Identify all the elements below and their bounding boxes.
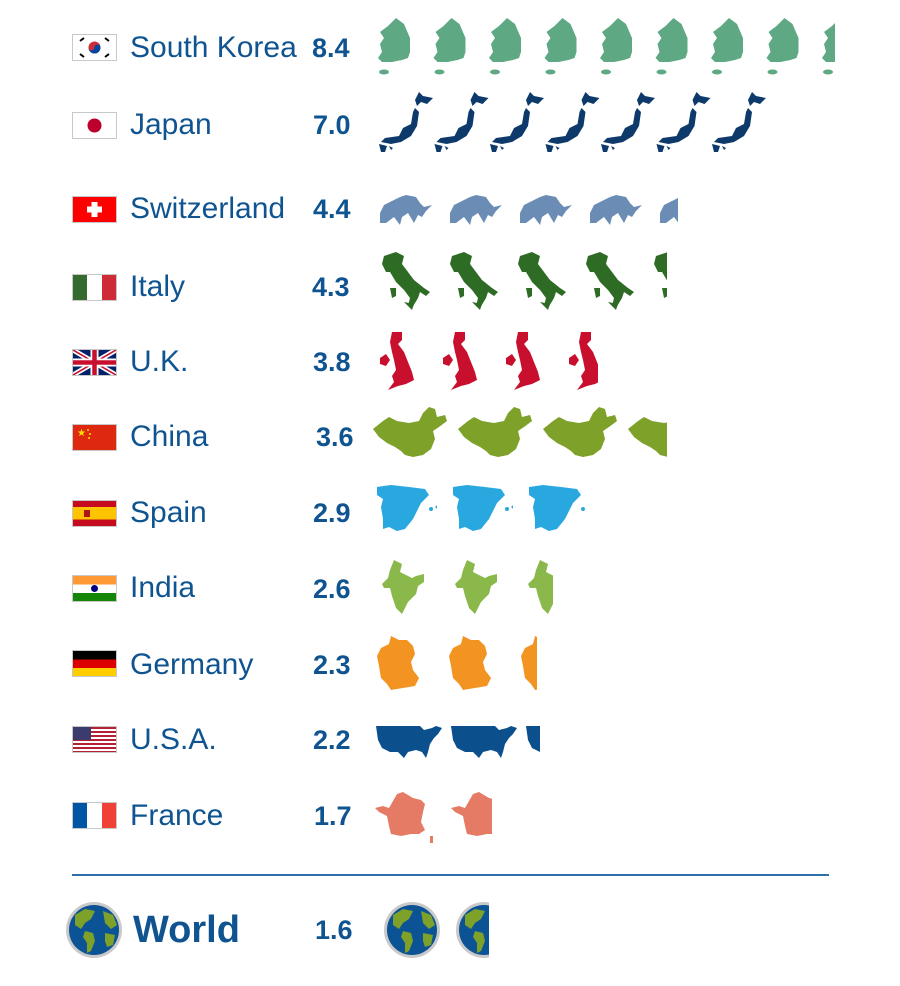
icons: Japan — [379, 92, 766, 152]
label: U.S.A.: U.S.A. — [130, 723, 217, 756]
label: Spain: Spain — [130, 496, 207, 529]
icons: U.K. — [380, 332, 598, 390]
icons: U.S.A. — [376, 726, 540, 758]
label: Germany: Germany — [130, 648, 253, 681]
flag: France — [72, 802, 117, 829]
icons: China — [373, 407, 667, 457]
value: 3.8: 3.8 — [313, 347, 351, 377]
value: 4.4: 4.4 — [313, 194, 351, 224]
row: South Korea — [72, 18, 835, 74]
flag: Japan — [72, 112, 117, 139]
flag: Spain — [72, 500, 117, 527]
value: 8.4: 8.4 — [312, 33, 350, 63]
value: 2.6: 2.6 — [313, 574, 351, 604]
value: 2.9: 2.9 — [313, 498, 351, 528]
label: Japan: Japan — [130, 108, 212, 141]
label: South Korea: South Korea — [130, 31, 297, 64]
icons: France — [375, 792, 492, 843]
icons: India — [382, 560, 553, 614]
flag: South Korea — [72, 34, 117, 61]
row: Japan — [72, 92, 766, 152]
icons: Germany — [377, 636, 537, 690]
flag: India — [72, 575, 117, 602]
icons: Spain — [377, 485, 585, 531]
flag: Italy — [72, 274, 117, 301]
label: France: France — [130, 799, 223, 832]
icons: Italy — [382, 252, 667, 310]
value: 4.3: 4.3 — [312, 272, 350, 302]
label: World: World — [133, 909, 240, 951]
value: 1.7: 1.7 — [314, 801, 352, 831]
value: 2.3: 2.3 — [313, 650, 351, 680]
icons: Switzerland — [380, 195, 678, 225]
label: U.K.: U.K. — [130, 345, 188, 378]
icons: South Korea — [378, 18, 835, 74]
row: China — [72, 407, 667, 457]
row: Spain — [72, 485, 585, 531]
row: Italy — [72, 252, 667, 310]
row: Germany — [72, 636, 537, 690]
label: Switzerland: Switzerland — [130, 192, 285, 225]
flag: China: ★ — [77, 428, 86, 439]
row: U.K. — [72, 332, 598, 390]
flag: China — [72, 424, 117, 451]
value: 2.2: 2.2 — [313, 725, 351, 755]
flag: UK — [72, 349, 117, 376]
row: France — [72, 792, 492, 843]
flag: Switzerland — [72, 196, 117, 223]
row: Switzerland — [72, 192, 678, 225]
value: 3.6: 3.6 — [316, 422, 354, 452]
label: Italy: Italy — [130, 270, 185, 303]
label: India: India — [130, 571, 195, 604]
icon: globe — [66, 902, 122, 958]
value: 1.6: 1.6 — [315, 915, 353, 945]
label: China: China — [130, 420, 208, 453]
row: U.S.A. — [72, 723, 540, 758]
row: World — [66, 902, 489, 958]
icons: World — [384, 902, 489, 958]
flag: Germany — [72, 650, 117, 677]
value: 7.0: 7.0 — [313, 110, 351, 140]
row: India — [72, 560, 553, 614]
flag: USA — [72, 726, 117, 753]
